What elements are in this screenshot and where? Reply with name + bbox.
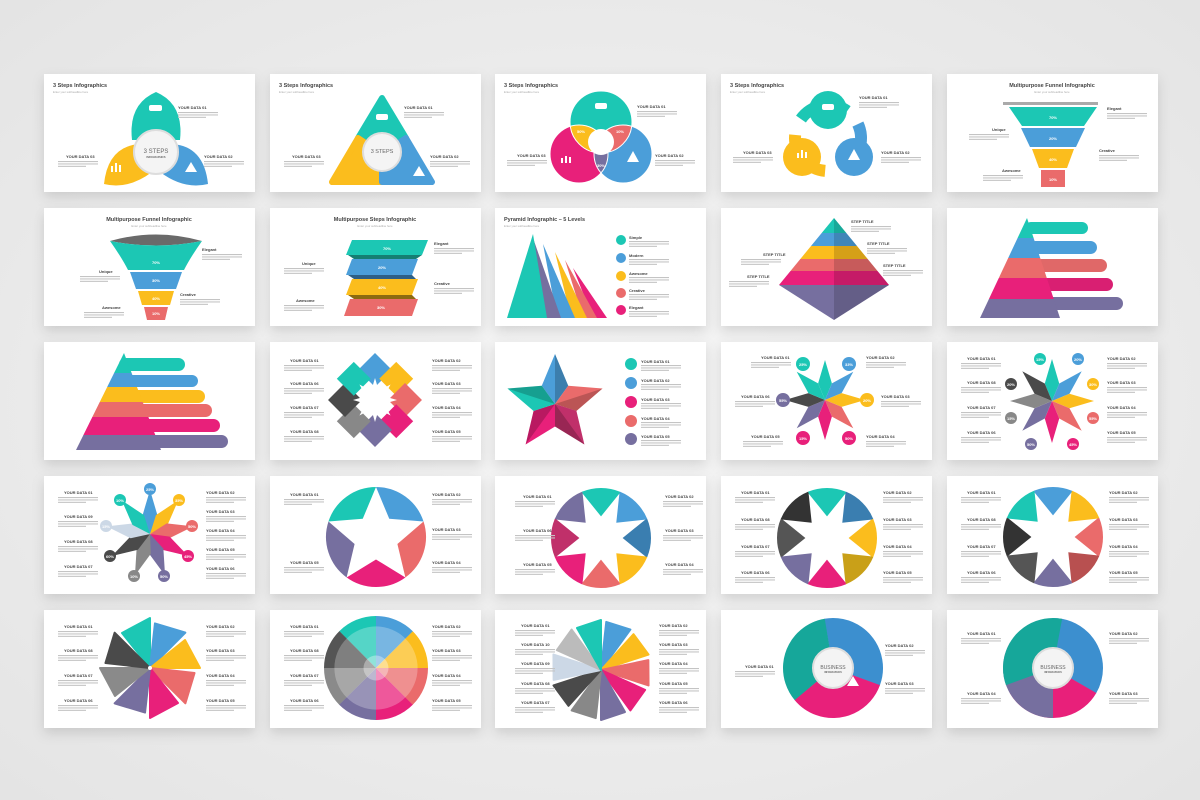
slide: circle 8 segments: [270, 610, 481, 728]
slide: business swirl 3: [721, 610, 932, 728]
labels: YOUR DATA 04: [1107, 405, 1136, 410]
labels: YOUR DATA 01: [967, 490, 996, 495]
slide: circle 8-star cutout variant 2: [947, 474, 1158, 600]
steps: 70%: [383, 246, 391, 251]
ring: [328, 353, 422, 447]
labels: YOUR DATA 03: [206, 648, 235, 653]
list: [625, 358, 681, 446]
labels: YOUR DATA 05: [1109, 570, 1138, 575]
star: [785, 360, 865, 440]
labels: YOUR DATA 01: [290, 358, 319, 363]
labels: YOUR DATA 06: [967, 570, 996, 575]
labels: YOUR DATA 08: [741, 517, 770, 522]
pyramid: [76, 353, 161, 450]
labels: YOUR DATA 02: [883, 490, 912, 495]
labels: YOUR DATA 06: [741, 394, 770, 399]
percent circles: 20%: [1007, 382, 1015, 387]
labels: YOUR DATA 09: [521, 661, 550, 666]
labels: YOUR DATA 04: [883, 544, 912, 549]
slide: pyramid bars left: [44, 342, 255, 460]
labels: YOUR DATA 07: [967, 544, 996, 549]
labels: Creative: [180, 292, 197, 297]
pinwheel: [546, 615, 656, 725]
labels: YOUR DATA 05: [206, 547, 235, 552]
percent circles: 20%: [863, 398, 871, 403]
slide: steps parallelograms: Enter your subheadline here: [357, 224, 393, 228]
labels: YOUR DATA 02: [432, 624, 461, 629]
labels: YOUR DATA 07: [64, 564, 93, 569]
labels: [961, 490, 1149, 583]
list: Awesome: [629, 271, 648, 276]
labels: YOUR DATA 04: [866, 434, 895, 439]
steps: 40%: [378, 285, 386, 290]
venn diagram: 50%: [577, 129, 585, 134]
labels: YOUR DATA 01: [637, 104, 666, 109]
labels: Unique: [992, 127, 1006, 132]
slide: circle 8-star cutout variant: [721, 475, 932, 601]
labels: YOUR DATA 04: [659, 661, 688, 666]
labels: [58, 624, 246, 711]
labels: YOUR DATA 03: [1109, 691, 1138, 696]
venn diagram: [550, 91, 652, 183]
labels: [284, 358, 472, 442]
funnel: 20%: [1049, 136, 1057, 141]
labels: YOUR DATA 08: [521, 681, 550, 686]
bars: [1025, 222, 1123, 310]
labels: YOUR DATA 10: [521, 642, 550, 647]
slide: circle 8-star cutout: [495, 475, 706, 601]
labels: [80, 247, 242, 318]
list: YOUR DATA 04: [641, 416, 670, 421]
labels: YOUR DATA 03: [659, 642, 688, 647]
labels: YOUR DATA 05: [1107, 430, 1136, 435]
title: Multipurpose Funnel Infographic: [1009, 83, 1095, 89]
labels: STEP TITLE: [883, 263, 906, 268]
labels: YOUR DATA 09: [64, 514, 93, 519]
percent circles: 25%: [799, 362, 807, 367]
labels: YOUR DATA 05: [751, 434, 780, 439]
triangle diagram: 3 STEPS: [371, 149, 394, 155]
labels: YOUR DATA 06: [64, 698, 93, 703]
labels: Awesome: [1002, 168, 1021, 173]
slide: 9 star circles: [44, 476, 255, 594]
petals diagram: [104, 92, 208, 186]
percent circles: 10%: [130, 574, 138, 579]
title: 3 Steps Infographics: [53, 83, 107, 89]
labels: [284, 624, 472, 711]
title: 3 Steps Infographics: [730, 83, 784, 89]
bars: [119, 358, 228, 448]
circle chart: [538, 475, 664, 601]
labels: YOUR DATA 03: [1107, 380, 1136, 385]
labels: YOUR DATA 01: [967, 631, 996, 636]
percent circles: 55%: [779, 398, 787, 403]
percent circles: [100, 483, 198, 582]
slide: 8 star with percentages: [721, 342, 932, 460]
list: YOUR DATA 03: [641, 397, 670, 402]
funnel: 40%: [152, 296, 160, 301]
slide: business swirl 4: [947, 610, 1158, 728]
labels: STEP TITLE: [747, 274, 770, 279]
percent circles: 33%: [845, 362, 853, 367]
labels: YOUR DATA 02: [1109, 631, 1138, 636]
slide: 3D star: [495, 342, 706, 460]
percent circles: 50%: [1027, 442, 1035, 447]
labels: YOUR DATA 02: [430, 154, 459, 159]
labels: YOUR DATA 08: [64, 648, 93, 653]
list: Elegant: [629, 305, 644, 310]
labels: YOUR DATA 02: [206, 624, 235, 629]
slide: pyramid 5 levels: [495, 208, 706, 326]
steps: 20%: [378, 265, 386, 270]
slide: funnel with top: [44, 208, 255, 326]
swirl circle: INFOGRAPHICS: [824, 671, 842, 674]
petals diagram: INFOGRAPHICS: [146, 156, 166, 159]
labels: YOUR DATA 05: [523, 562, 552, 567]
funnel: 40%: [1049, 157, 1057, 162]
list: Modern: [629, 253, 644, 258]
circle chart: [328, 487, 424, 577]
swirl circle: BUSINESS: [1040, 665, 1066, 671]
labels: YOUR DATA 07: [290, 673, 319, 678]
labels: [969, 106, 1147, 181]
labels: YOUR DATA 06: [206, 566, 235, 571]
list: YOUR DATA 02: [641, 378, 670, 383]
labels: [284, 492, 472, 573]
percent circles: 55%: [1089, 416, 1097, 421]
percent circles: 35%: [175, 498, 183, 503]
labels: YOUR DATA 05: [883, 570, 912, 575]
funnel: 70%: [152, 260, 160, 265]
labels: YOUR DATA 02: [866, 355, 895, 360]
labels: YOUR DATA 02: [881, 150, 910, 155]
percent circles: 25%: [146, 487, 154, 492]
labels: STEP TITLE: [763, 252, 786, 257]
labels: YOUR DATA 04: [206, 673, 235, 678]
labels: [284, 241, 474, 311]
labels: STEP TITLE: [851, 219, 874, 224]
labels: YOUR DATA 02: [659, 623, 688, 628]
swirl circle: [798, 633, 868, 703]
labels: YOUR DATA 01: [64, 624, 93, 629]
labels: YOUR DATA 02: [655, 153, 684, 158]
labels: Creative: [434, 281, 451, 286]
funnel: [1003, 102, 1098, 187]
labels: Unique: [99, 269, 113, 274]
labels: YOUR DATA 03: [432, 381, 461, 386]
labels: [735, 355, 921, 447]
labels: YOUR DATA 03: [881, 394, 910, 399]
slide: 3 steps cycle: [721, 74, 932, 192]
percent circles: 50%: [845, 436, 853, 441]
labels: Elegant: [1107, 106, 1122, 111]
steps: [344, 240, 428, 316]
slide: 8 star circles: [947, 342, 1158, 460]
swirl circle: INFOGRAPHICS: [1044, 671, 1062, 674]
labels: YOUR DATA 02: [1109, 490, 1138, 495]
labels: YOUR DATA 04: [432, 405, 461, 410]
title: 3 Steps Infographics: [279, 83, 333, 89]
labels: YOUR DATA 02: [885, 643, 914, 648]
percent circles: 45%: [184, 554, 192, 559]
labels: YOUR DATA 03: [517, 153, 546, 158]
percent circles: 60%: [106, 554, 114, 559]
circle chart: [334, 626, 418, 710]
labels: YOUR DATA 04: [665, 562, 694, 567]
circle chart: [764, 475, 890, 601]
labels: [284, 105, 470, 167]
labels: YOUR DATA 06: [290, 698, 319, 703]
labels: Elegant: [202, 247, 217, 252]
percent circles: 15%: [799, 436, 807, 441]
percent circles: 15%: [102, 524, 110, 529]
slide: 3 steps cycle: Enter your subheadline here: [730, 90, 766, 94]
funnel: 10%: [1049, 177, 1057, 182]
swirl circle: [1019, 634, 1087, 702]
labels: YOUR DATA 03: [743, 150, 772, 155]
percent circles: 15%: [1036, 357, 1044, 362]
slide: pinwheel 8: [44, 610, 255, 728]
labels: YOUR DATA 06: [290, 381, 319, 386]
labels: Creative: [1099, 148, 1116, 153]
title: Multipurpose Steps Infographic: [334, 217, 416, 223]
labels: YOUR DATA 03: [883, 517, 912, 522]
labels: YOUR DATA 05: [206, 698, 235, 703]
slide: 3 steps petals: [44, 74, 255, 192]
steps: 30%: [377, 305, 385, 310]
venn diagram: 30%: [597, 163, 605, 168]
title: Multipurpose Funnel Infographic: [106, 217, 192, 223]
labels: YOUR DATA 03: [885, 681, 914, 686]
labels: [58, 490, 246, 579]
labels: YOUR DATA 05: [290, 560, 319, 565]
labels: YOUR DATA 05: [432, 429, 461, 434]
list: Simple: [629, 235, 643, 240]
labels: YOUR DATA 01: [741, 490, 770, 495]
list: Creative: [629, 288, 646, 293]
slide: pyramid 5 levels: Enter your subheadline here: [504, 224, 540, 228]
labels: YOUR DATA 03: [206, 509, 235, 514]
percent circles: 20%: [1074, 357, 1082, 362]
labels: [58, 105, 244, 167]
title: 3 Steps Infographics: [504, 83, 558, 89]
labels: YOUR DATA 08: [64, 539, 93, 544]
labels: YOUR DATA 08: [290, 648, 319, 653]
labels: YOUR DATA 01: [859, 95, 888, 100]
labels: YOUR DATA 02: [665, 494, 694, 499]
labels: YOUR DATA 04: [432, 560, 461, 565]
labels: YOUR DATA 03: [665, 528, 694, 533]
labels: YOUR DATA 08: [967, 517, 996, 522]
labels: YOUR DATA 01: [745, 664, 774, 669]
labels: [961, 356, 1147, 443]
labels: YOUR DATA 01: [64, 490, 93, 495]
petals diagram: 3 STEPS: [144, 149, 168, 155]
labels: YOUR DATA 05: [432, 698, 461, 703]
labels: [735, 490, 923, 583]
labels: [515, 494, 703, 575]
labels: YOUR DATA 01: [761, 355, 790, 360]
slide: pyramid with bars: [947, 208, 1158, 329]
labels: YOUR DATA 07: [64, 673, 93, 678]
labels: YOUR DATA 04: [967, 691, 996, 696]
list: YOUR DATA 05: [641, 434, 670, 439]
labels: YOUR DATA 06: [741, 570, 770, 575]
percent circles: 30%: [1089, 382, 1097, 387]
labels: YOUR DATA 07: [521, 700, 550, 705]
percent circles: 10%: [116, 498, 124, 503]
slide: funnel layers: [947, 74, 1158, 192]
cycle diagram: [782, 91, 874, 184]
venn diagram: 10%: [616, 129, 624, 134]
star: [503, 354, 607, 452]
slide: pinwheel 10: [495, 610, 706, 728]
labels: YOUR DATA 07: [290, 405, 319, 410]
labels: YOUR DATA 03: [292, 154, 321, 159]
pinwheel: [95, 613, 205, 723]
labels: YOUR DATA 01: [290, 492, 319, 497]
labels: YOUR DATA 01: [290, 624, 319, 629]
labels: YOUR DATA 01: [521, 623, 550, 628]
percent circles: 50%: [188, 524, 196, 529]
slide: 3 steps venn: Enter your subheadline here: [504, 90, 540, 94]
list: YOUR DATA 01: [641, 359, 670, 364]
labels: YOUR DATA 01: [404, 105, 433, 110]
percent circles: 50%: [160, 574, 168, 579]
labels: [735, 643, 925, 694]
labels: Unique: [302, 261, 316, 266]
funnel: 30%: [152, 278, 160, 283]
labels: YOUR DATA 05: [659, 681, 688, 686]
labels: STEP TITLE: [867, 241, 890, 246]
slide: funnel with top: Enter your subheadline here: [131, 224, 167, 228]
labels: [729, 219, 923, 287]
labels: YOUR DATA 06: [523, 528, 552, 533]
slide: 3 steps venn: [495, 74, 706, 192]
labels: YOUR DATA 03: [1109, 517, 1138, 522]
labels: YOUR DATA 08: [290, 429, 319, 434]
labels: Elegant: [434, 241, 449, 246]
percent circles: 45%: [1069, 442, 1077, 447]
labels: YOUR DATA 03: [432, 527, 461, 532]
labels: [733, 95, 921, 163]
funnel: 10%: [152, 311, 160, 316]
funnel: [110, 234, 202, 320]
labels: YOUR DATA 02: [1107, 356, 1136, 361]
funnel: 70%: [1049, 115, 1057, 120]
labels: YOUR DATA 02: [432, 492, 461, 497]
slide: octagon ring: [270, 342, 481, 460]
labels: YOUR DATA 02: [432, 358, 461, 363]
percent circles: [776, 357, 874, 445]
title: Pyramid Infographic – 5 Levels: [504, 217, 585, 223]
labels: YOUR DATA 03: [66, 154, 95, 159]
labels: YOUR DATA 08: [967, 380, 996, 385]
labels: Awesome: [102, 305, 121, 310]
list: [616, 235, 669, 317]
labels: YOUR DATA 01: [967, 356, 996, 361]
slide: 3 steps triangle: Enter your subheadline here: [279, 90, 315, 94]
labels: Awesome: [296, 298, 315, 303]
labels: YOUR DATA 04: [432, 673, 461, 678]
labels: YOUR DATA 04: [1109, 544, 1138, 549]
slide: 3 steps petals: Enter your subheadline here: [53, 90, 89, 94]
labels: YOUR DATA 04: [206, 528, 235, 533]
triangle diagram: [332, 98, 432, 182]
star: [105, 490, 195, 578]
star: [1010, 359, 1094, 443]
labels: YOUR DATA 02: [204, 154, 233, 159]
pyramid slices: [507, 234, 607, 318]
labels: YOUR DATA 06: [967, 430, 996, 435]
slide: 3 steps triangle: [270, 74, 481, 192]
labels: YOUR DATA 07: [967, 405, 996, 410]
labels: YOUR DATA 01: [178, 105, 207, 110]
labels: [507, 104, 695, 166]
swirl circle: BUSINESS: [820, 665, 846, 671]
labels: YOUR DATA 02: [206, 490, 235, 495]
slide: steps parallelograms: [270, 208, 481, 326]
percent circles: [1005, 353, 1099, 450]
pyramid: [980, 218, 1060, 318]
labels: YOUR DATA 03: [432, 648, 461, 653]
slide: 3D pyramid: [721, 208, 932, 326]
percent circles: 15%: [1007, 416, 1015, 421]
labels: [515, 623, 699, 713]
slide: circle 5-star cutout: [270, 476, 481, 594]
slide: funnel layers: Enter your subheadline here: [1034, 90, 1070, 94]
labels: YOUR DATA 07: [741, 544, 770, 549]
pyramid: [779, 218, 889, 320]
circle chart: [990, 474, 1116, 600]
labels: YOUR DATA 06: [659, 700, 688, 705]
labels: YOUR DATA 01: [523, 494, 552, 499]
labels: [961, 631, 1149, 704]
